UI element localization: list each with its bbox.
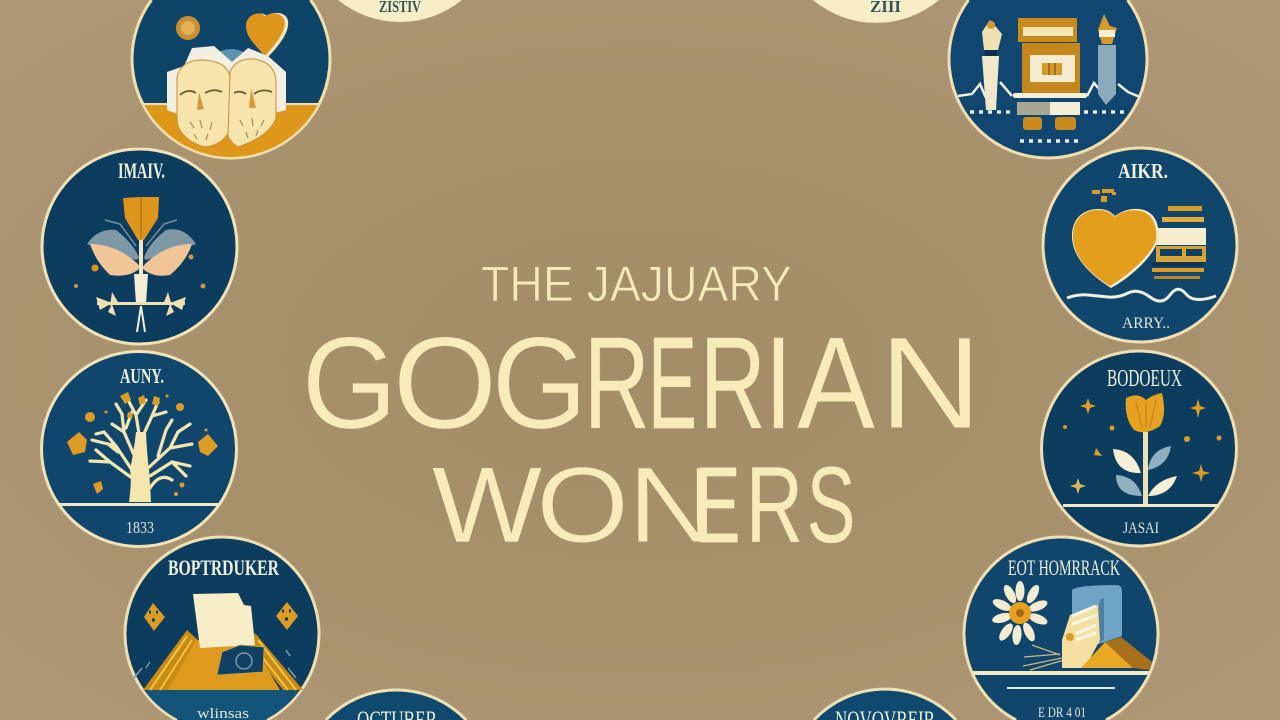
title line: woners: W	[432, 444, 542, 565]
title line: woners: E	[695, 444, 740, 565]
medallion: heart and stripes	[1043, 148, 1237, 342]
icon: fuzzy sun	[176, 16, 200, 40]
label: Aikr: AIKR.	[1118, 159, 1168, 183]
icon: stripes	[1152, 206, 1206, 279]
icon: tulip	[1113, 393, 1177, 505]
icon: paper on gold book	[134, 593, 303, 690]
title	[302, 256, 982, 565]
label: Auny: AUNY.	[120, 364, 164, 388]
label: May: IMAIV.	[118, 158, 165, 183]
medallion: top cream right	[813, 0, 939, 23]
medallion: October	[326, 690, 466, 720]
icon: large heart	[1072, 209, 1158, 288]
medallion: Septrouker	[120, 537, 320, 720]
medallion: top cream left	[338, 0, 462, 22]
icon: central machine	[1013, 18, 1087, 130]
title line: the jajuary: THE JAJUARY	[481, 256, 792, 312]
icon: right pillar	[1098, 14, 1117, 105]
medallion: tulip flower	[1042, 351, 1236, 546]
title line: woners: S	[807, 444, 855, 565]
title line: gogrerian: E	[648, 309, 697, 456]
icon: book and hand	[1062, 585, 1152, 670]
medallion: daisy and hand	[964, 537, 1158, 720]
icon: left pillar	[982, 20, 1002, 110]
title line: gogrerian: O	[392, 309, 498, 456]
icon: rays	[1023, 645, 1064, 670]
icon: heart	[246, 13, 288, 58]
label: Septrouker: BOPTRDUKER	[168, 555, 280, 580]
dotted rows	[970, 112, 1126, 141]
label: flower month: BODOEUX	[1107, 366, 1182, 392]
icon: two faces	[167, 46, 286, 147]
icon: wave line	[1067, 289, 1216, 301]
icon: tulip and birds	[74, 197, 206, 332]
medallion: Auny	[42, 352, 236, 546]
title line: woners: N	[628, 444, 717, 565]
label: lower caption: JASAI	[1123, 520, 1159, 537]
icon: daisy	[991, 581, 1049, 645]
label: month heading: EOT HOMRRACK	[1008, 555, 1120, 580]
title line: gogrerian: N	[879, 309, 982, 456]
medallion: twin faces	[130, 0, 330, 160]
title line: gogrerian: R	[584, 309, 650, 456]
title line: woners: R	[746, 444, 803, 565]
title line: gogrerian: G	[492, 309, 588, 456]
medallion: machine and pillars	[949, 0, 1147, 158]
icon: dotted line	[1007, 687, 1115, 689]
label: year 1833: 1833	[126, 518, 154, 537]
title line: gogrerian: A	[797, 309, 876, 456]
title line: gogrerian: R	[700, 309, 766, 456]
medallion: November	[814, 689, 956, 720]
icon: tree	[67, 392, 218, 502]
label: lower caption: ARRY..	[1122, 315, 1170, 332]
icon: small gold marks	[1092, 189, 1116, 202]
icon: stars	[1063, 398, 1222, 494]
title line: woners: O	[536, 444, 629, 565]
title line: gogrerian: I	[765, 309, 792, 456]
title line: gogrerian: G	[302, 309, 398, 456]
icon: wave line	[958, 82, 1140, 98]
medallion: May	[42, 149, 237, 344]
